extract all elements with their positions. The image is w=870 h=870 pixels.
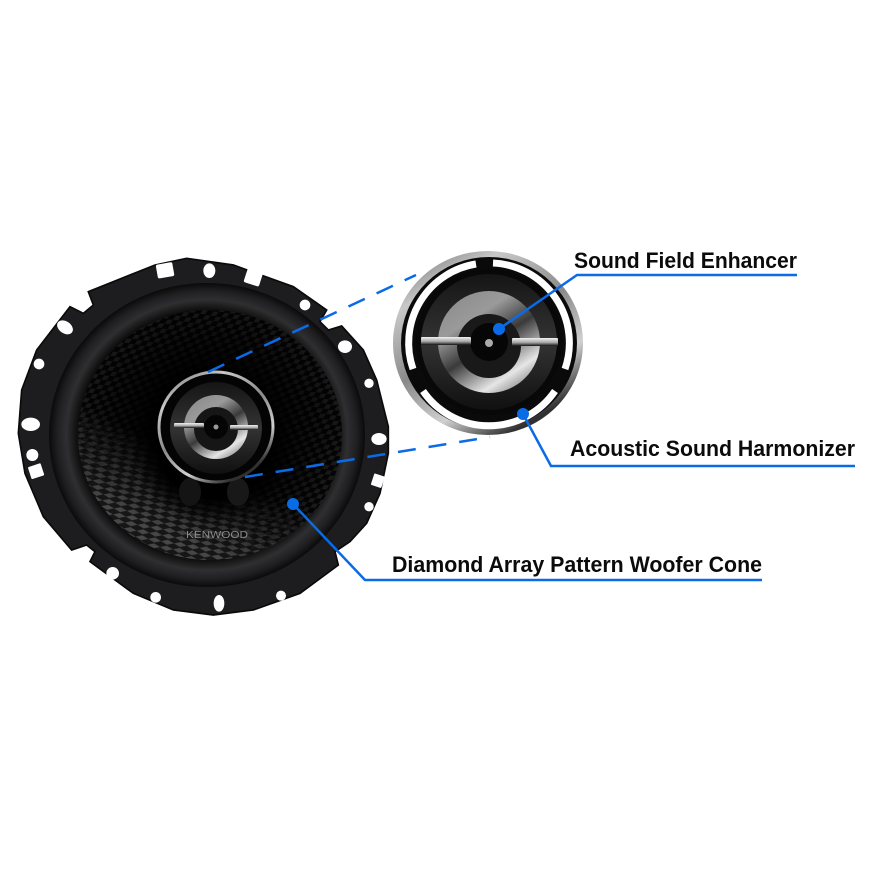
callout: sound field enhancer <box>493 248 797 335</box>
small tweeter <box>159 372 273 482</box>
tweeter disc <box>416 269 562 415</box>
callout: sound field enhancer: Sound Field Enhancer <box>574 248 797 273</box>
dashed zoom line: top <box>208 275 416 372</box>
silver dome ring <box>438 291 540 393</box>
rubber surround <box>49 283 365 587</box>
white ring segments <box>409 263 569 426</box>
callout: diamond array pattern woofer cone <box>287 498 762 580</box>
callout: acoustic sound harmonizer: Acoustic Sound Harmonizer <box>570 436 855 461</box>
dashed zoom line: bottom <box>245 437 490 477</box>
enlarged tweeter <box>393 251 583 435</box>
infographic: speaker feature diagram <box>18 251 855 616</box>
left tweeter bar <box>421 337 471 345</box>
diamond array woofer cone <box>78 310 342 560</box>
right tweeter bar <box>512 338 558 346</box>
mounting flange <box>18 258 388 615</box>
brand name: KENWOOD <box>186 530 248 541</box>
metallic outer ring <box>393 251 583 435</box>
woofer speaker <box>18 258 388 615</box>
callout: diamond array pattern woofer cone: Diamond Array Pattern Woofer Cone <box>392 552 762 577</box>
callout: acoustic sound harmonizer <box>517 408 855 466</box>
